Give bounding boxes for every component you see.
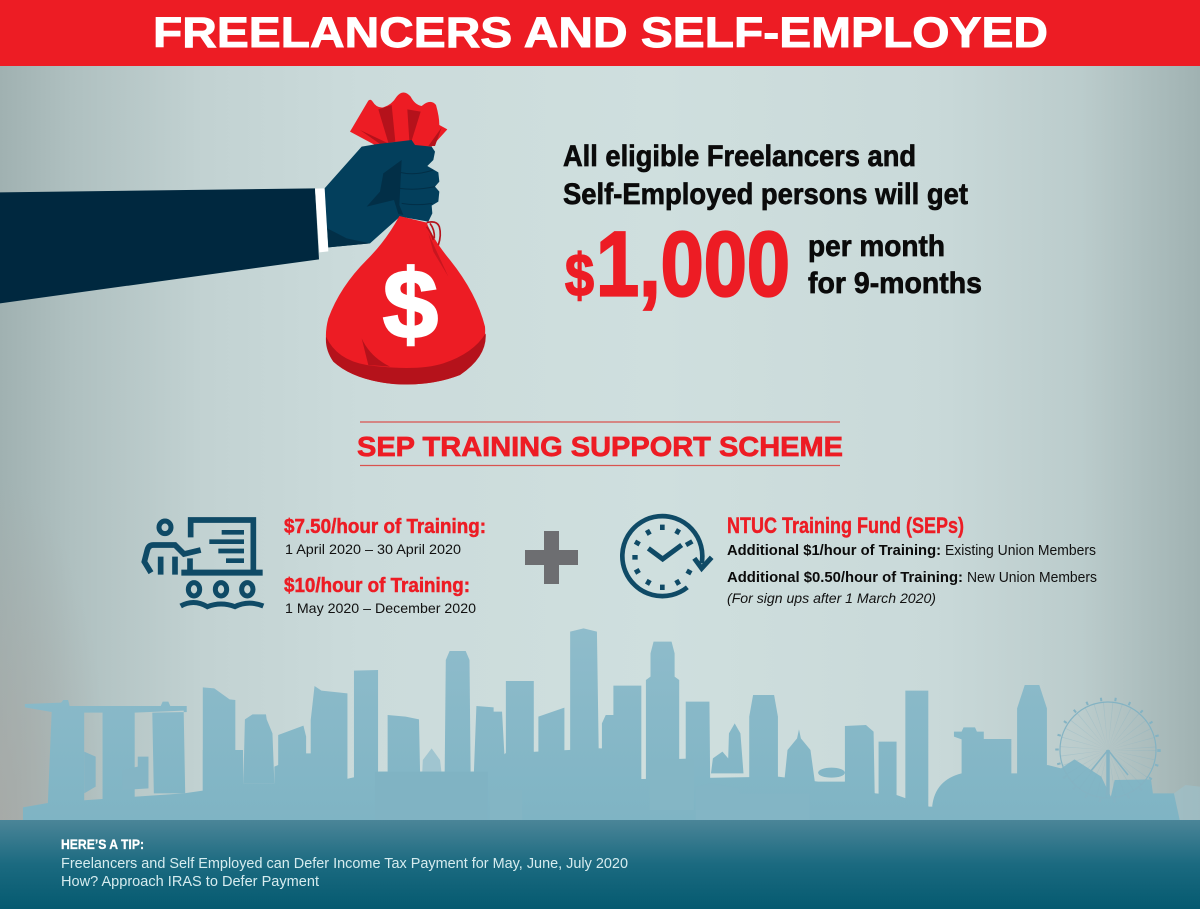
rates: training allowance: $7.50/hour of Training:	[284, 515, 486, 538]
icon: trainer with audience	[144, 520, 263, 607]
skyline: left half	[23, 628, 600, 820]
rates: training allowance: 1 May 2020 – December 2020	[285, 600, 476, 616]
frill folds	[360, 105, 442, 146]
hand	[324, 140, 439, 247]
icon: plus	[525, 531, 578, 584]
headline	[563, 140, 968, 211]
skyline: right half	[585, 642, 1200, 820]
illustration: arm holding money bag	[0, 92, 486, 384]
NTUC training fund text	[727, 513, 1097, 606]
headline: Self-Employed persons will get	[563, 178, 968, 211]
amount: $1,000 per month: $	[565, 242, 594, 309]
footer tip panel	[0, 820, 1200, 909]
ferris wheel	[1057, 699, 1159, 801]
icon: clock with arrow	[622, 516, 712, 596]
sleeve	[0, 188, 319, 303]
NTUC training fund text: NTUC Training Fund (SEPs)	[727, 513, 964, 538]
tip text: Freelancers and Self Employed can Defer Income Tax Payment for May, June, July 2020	[61, 855, 628, 872]
NTUC training fund text: New Union Members	[967, 569, 1097, 586]
rates: training allowance	[284, 515, 486, 616]
amount: $1,000 per month: 1,000	[596, 214, 790, 316]
tip heading: HERE’S A TIP:	[61, 836, 144, 852]
NTUC training fund text: Additional $0.50/hour of Training:	[727, 569, 963, 586]
rates: training allowance: $10/hour of Training:	[284, 574, 470, 597]
title banner: FREELANCERS AND SELF-EMPLOYED	[153, 9, 1048, 57]
amount: $1,000 per month: for 9-months	[808, 267, 982, 300]
title banner	[0, 0, 1200, 66]
dollar sign on bag: $	[383, 250, 438, 359]
cuff	[315, 188, 328, 252]
bag string	[427, 222, 440, 245]
section heading: SEP training support scheme: SEP TRAINING SUPPORT SCHEME	[357, 431, 843, 462]
city skyline	[23, 628, 1200, 820]
amount: $1,000 per month: per month	[808, 230, 945, 263]
skyline lower band	[585, 759, 1180, 820]
headline: All eligible Freelancers and	[563, 140, 916, 173]
NTUC training fund text: Existing Union Members	[945, 542, 1096, 559]
footer tip panel: How? Approach IRAS to Defer Payment	[61, 873, 320, 890]
skyline lower band	[23, 748, 600, 820]
bag body	[326, 216, 485, 384]
NTUC training fund text: Additional $1/hour of Training:	[727, 542, 941, 559]
NTUC training fund text: (For sign ups after 1 March 2020)	[727, 590, 936, 606]
bag shading	[326, 333, 486, 384]
bag top frill	[350, 92, 447, 147]
amount: $1,000 per month	[565, 214, 982, 316]
bag folds	[428, 233, 448, 277]
rates: training allowance: 1 April 2020 – 30 April 2020	[285, 541, 461, 557]
hand shading	[367, 160, 403, 215]
